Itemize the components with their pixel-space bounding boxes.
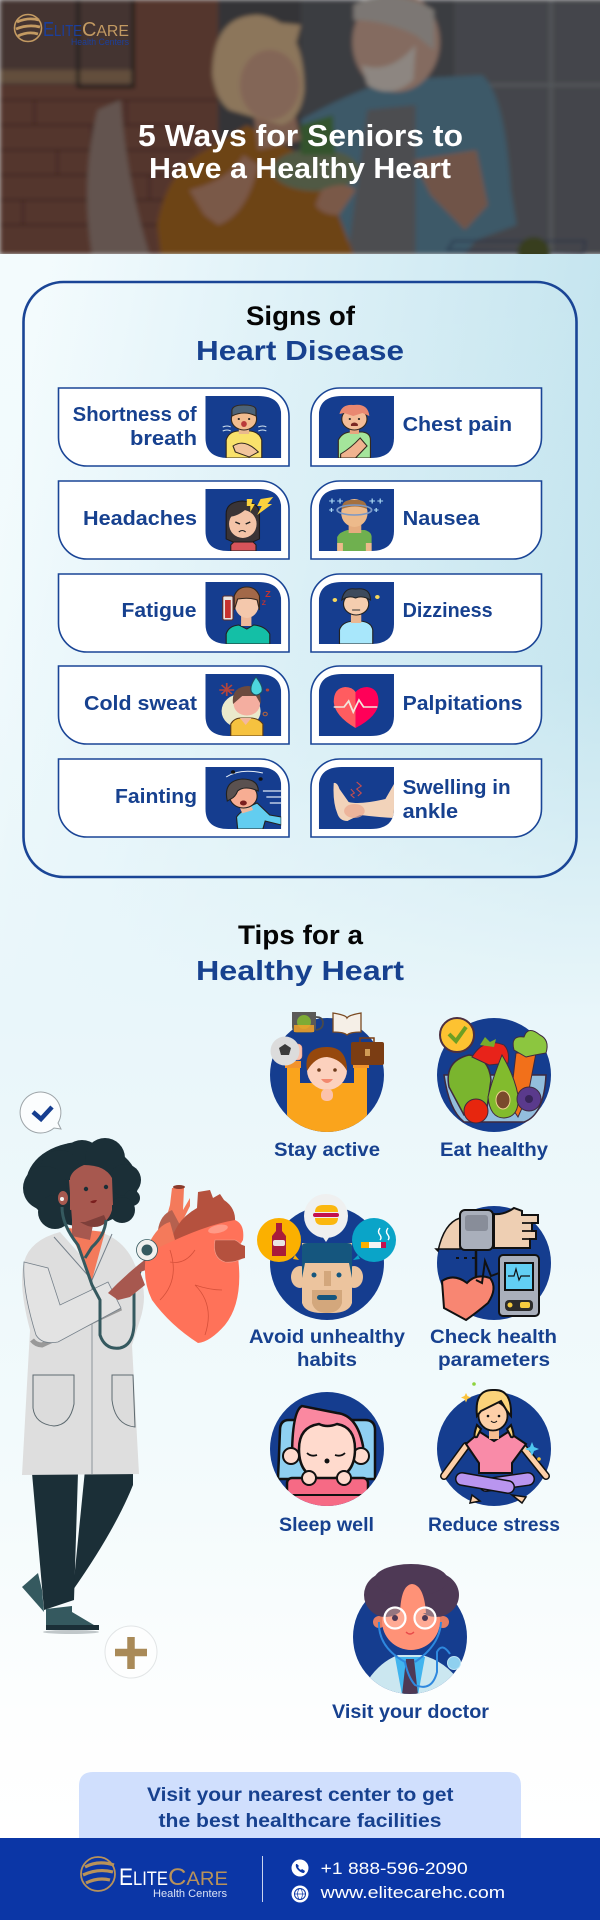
logo: Elite Care top: ELITE — [43, 19, 82, 41]
card: dizziness — [311, 574, 542, 652]
card: shortness of breath — [58, 388, 289, 466]
card: chest pain: Chest pain — [403, 414, 512, 436]
card: cold sweat: Cold sweat — [84, 693, 197, 715]
tip: stay active — [270, 1012, 384, 1161]
title: Have a Healthy Heart — [149, 153, 452, 185]
card: headaches: Headaches — [83, 508, 197, 530]
illustration: doctor with heart — [20, 1092, 245, 1678]
tip: visit your doctor: Visit your doctor — [332, 1702, 490, 1723]
logo: Elite Care footer — [81, 1857, 228, 1900]
tip: visit your doctor — [332, 1564, 490, 1723]
tip: avoid unhealthy habits: Avoid unhealthy — [249, 1327, 405, 1348]
card: palpitations: Palpitations — [403, 693, 523, 715]
card: dizziness: Dizziness — [403, 600, 493, 622]
tip: avoid unhealthy habits — [249, 1194, 405, 1371]
tip: check health parameters — [430, 1206, 557, 1371]
logo: Elite Care footer: ELITE — [119, 1864, 168, 1891]
card: fainting: Fainting — [115, 786, 197, 808]
heading: signs of heart disease: Heart Disease — [196, 335, 404, 366]
tip: stay active: Stay active — [274, 1140, 380, 1161]
callout: visit nearest center: Visit your nearest center to get — [147, 1785, 454, 1806]
tip: avoid unhealthy habits: habits — [297, 1350, 357, 1371]
icon: check speech bubble — [20, 1092, 61, 1133]
footer bar — [0, 1838, 600, 1920]
card: fatigue: Fatigue — [122, 600, 196, 622]
card: fatigue: Z — [265, 590, 272, 599]
icon: anatomical heart — [136, 1185, 245, 1343]
contact: phone: +1 888-596-2090 — [321, 1860, 468, 1878]
card: cold sweat — [58, 666, 289, 744]
card: nausea — [311, 481, 542, 559]
card: fatigue: Z — [262, 600, 266, 607]
heading: tips for a healthy heart: Tips for a — [238, 920, 364, 950]
heading: tips for a healthy heart — [196, 920, 404, 986]
card: swelling in ankle: Swelling in — [403, 777, 511, 799]
contact: phone — [292, 1860, 468, 1878]
logo: Elite Care top: CARE — [82, 19, 129, 41]
panel: signs of heart disease — [24, 282, 576, 877]
tip: sleep well: Sleep well — [279, 1515, 374, 1536]
card: nausea: Nausea — [403, 508, 481, 530]
tip: check health parameters: parameters — [438, 1350, 550, 1371]
card: swelling in ankle — [311, 759, 542, 837]
card: shortness of breath: breath — [130, 428, 197, 450]
heading: tips for a healthy heart: Healthy Heart — [196, 955, 404, 986]
logo: Elite Care footer: Health Centers — [153, 1888, 227, 1900]
header photo: senior couple — [0, 0, 600, 267]
heading: signs of heart disease: Signs of — [246, 301, 356, 331]
tip: sleep well — [270, 1392, 384, 1535]
tip: eat healthy — [437, 1018, 551, 1161]
tip: reduce stress — [428, 1382, 560, 1536]
logo: Elite Care footer: CARE — [168, 1864, 228, 1891]
title: 5 Ways for Seniors to — [138, 118, 463, 153]
tip: eat healthy: Eat healthy — [440, 1140, 548, 1161]
contact: website: www.elitecarehc.com — [320, 1884, 505, 1902]
callout: visit nearest center — [79, 1772, 521, 1838]
heading: signs of heart disease — [196, 301, 404, 366]
doctor figure — [22, 1138, 147, 1634]
card: fatigue — [58, 574, 289, 652]
logo: Elite Care top: Health Centers — [71, 37, 129, 47]
tip: reduce stress: Reduce stress — [428, 1515, 560, 1536]
card: swelling in ankle: ankle — [403, 801, 458, 823]
callout: visit nearest center: the best healthcare facilities — [158, 1811, 442, 1832]
card: headaches — [58, 481, 289, 559]
card: shortness of breath: Shortness of — [73, 404, 197, 426]
logo: Elite Care top — [14, 14, 129, 47]
card: fainting — [58, 759, 289, 837]
tip: check health parameters: Check health — [430, 1327, 557, 1348]
title — [138, 118, 463, 185]
card: palpitations — [311, 666, 542, 744]
icon: plus bubble — [105, 1626, 157, 1678]
card: chest pain — [311, 388, 542, 466]
